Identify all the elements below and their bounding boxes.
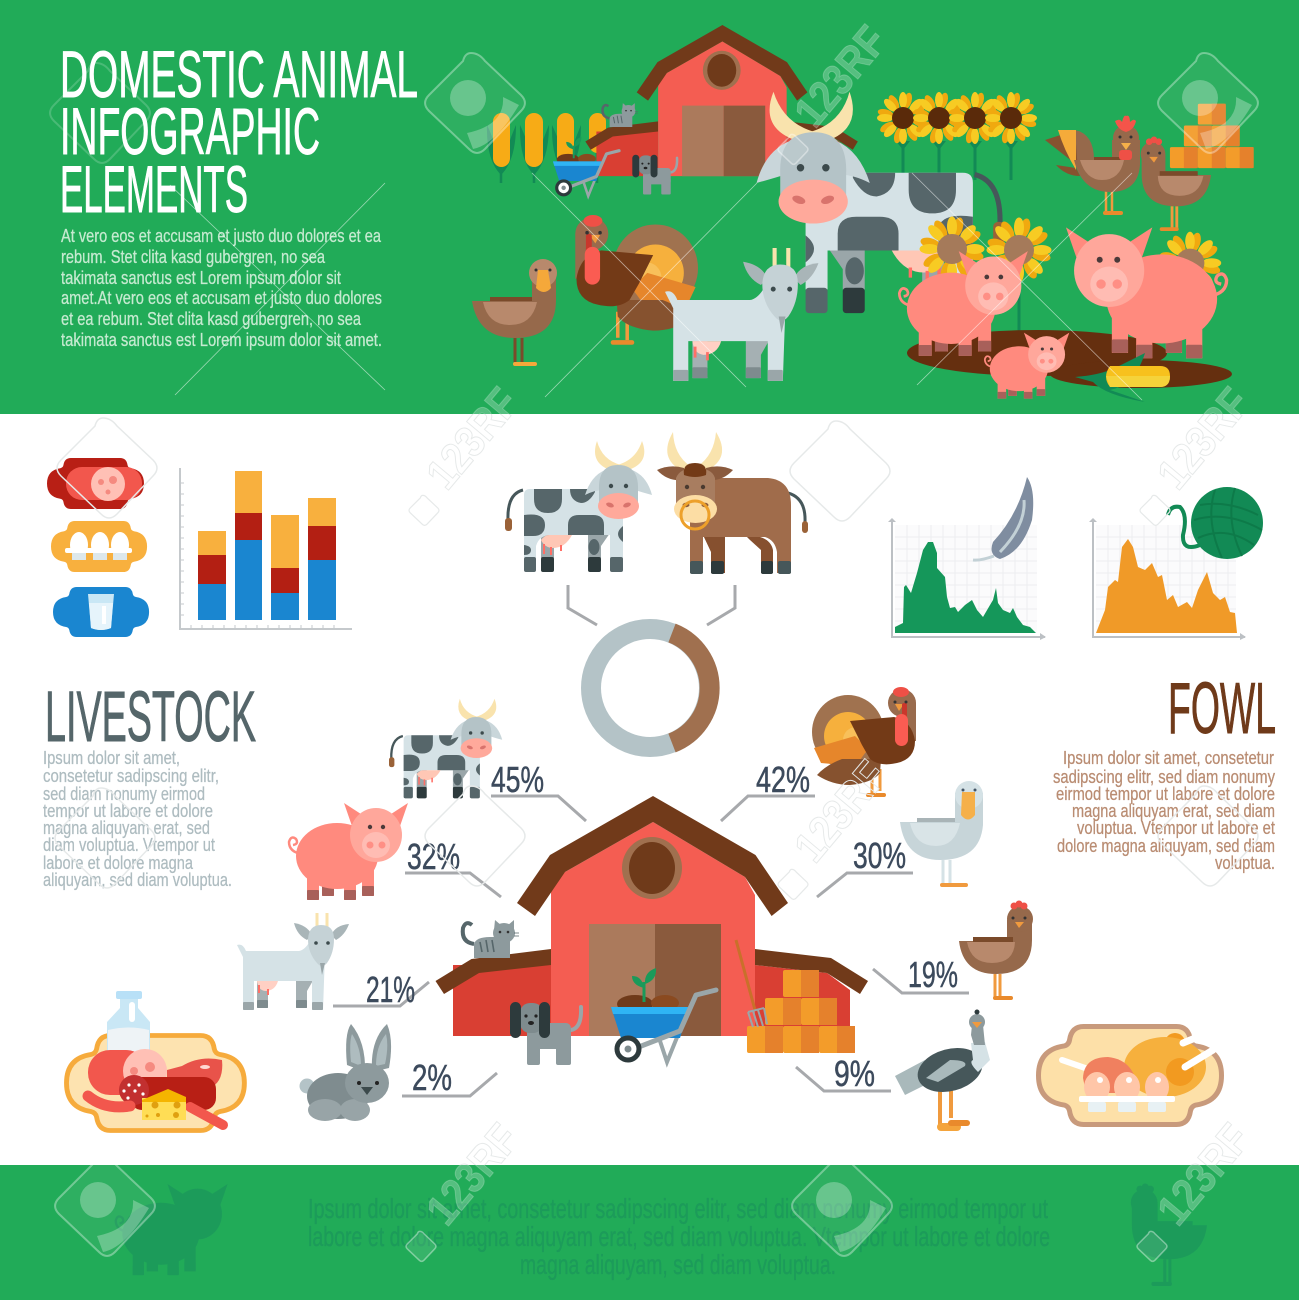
corn row bbox=[487, 113, 606, 183]
livestock paragraph: Ipsum dolor sit amet, bbox=[43, 748, 180, 768]
icon: yarn ball bbox=[1168, 487, 1263, 559]
footer paragraph bbox=[308, 1193, 1050, 1280]
fowl food plaque bbox=[1038, 1026, 1222, 1124]
title: DOMESTIC ANIMAL bbox=[60, 37, 418, 111]
percent labels: 21% bbox=[366, 969, 415, 1010]
livestock paragraph: aliquyam, sed diam voluptua. bbox=[43, 870, 232, 890]
livestock paragraph: diam voluptua. Vtempor ut bbox=[43, 835, 215, 855]
central hay stack bbox=[747, 970, 855, 1053]
percent labels: 45% bbox=[491, 759, 544, 800]
header rooster bbox=[1045, 116, 1140, 215]
hen with 19 percent bbox=[959, 900, 1033, 1000]
header corn cob bbox=[1075, 353, 1170, 402]
header band bbox=[0, 0, 1299, 414]
small cow with 45 percent bbox=[389, 699, 502, 798]
fowl paragraph bbox=[1053, 748, 1275, 873]
area chart: wool bbox=[1089, 518, 1246, 640]
livestock paragraph: labore et dolore magna bbox=[43, 853, 194, 873]
header sunflowers bbox=[877, 92, 1037, 180]
central barn bbox=[436, 796, 868, 1065]
percent labels: 2% bbox=[412, 1057, 452, 1098]
title: INFOGRAPHIC bbox=[60, 94, 320, 168]
livestock paragraph bbox=[43, 748, 232, 890]
rabbit with 2 percent bbox=[300, 1024, 391, 1121]
donut chart bbox=[591, 629, 710, 747]
percent labels: 42% bbox=[756, 759, 810, 800]
header piglet bbox=[985, 333, 1069, 399]
goat with 21 percent bbox=[237, 913, 349, 1010]
intro paragraph: takimata sanctus est Lorem ipsum dolor sit bbox=[61, 268, 341, 288]
header front sunflowers bbox=[919, 216, 1221, 340]
percent leader lines bbox=[333, 796, 969, 1096]
connector lines to donut bbox=[568, 585, 735, 625]
header pig small bbox=[899, 251, 1028, 356]
header barn bbox=[585, 25, 858, 194]
percent labels: 32% bbox=[407, 836, 460, 877]
header cow bbox=[757, 92, 1005, 313]
intro paragraph: At vero eos et accusam et justo duo dolores et ea bbox=[61, 226, 382, 246]
intro paragraph: et ea rebum. Stet clita kasd gubergren, no sea bbox=[61, 309, 362, 329]
ostrich with 9 percent bbox=[895, 1010, 990, 1131]
header goat bbox=[665, 248, 818, 381]
mud puddle bbox=[907, 330, 1232, 388]
area chart: feathers bbox=[888, 518, 1046, 640]
percent labels: 9% bbox=[834, 1053, 875, 1094]
central wheelbarrow bbox=[611, 968, 716, 1062]
percent labels: 19% bbox=[908, 954, 958, 995]
goose with 30 percent bbox=[900, 781, 983, 887]
footer pig silhouette bbox=[116, 1184, 228, 1275]
header hay stack bbox=[1170, 104, 1254, 168]
percent labels: 30% bbox=[853, 835, 906, 876]
header pig large bbox=[1066, 227, 1227, 358]
livestock paragraph: sed diam nonumy eirmod bbox=[43, 784, 205, 804]
header wheelbarrow bbox=[553, 137, 619, 196]
header duck bbox=[472, 259, 557, 366]
fowl paragraph: voluptua. bbox=[1215, 853, 1275, 873]
livestock paragraph: consetetur sadipscing elitr, bbox=[43, 766, 219, 786]
footer paragraph: magna aliquyam, sed diam voluptua. bbox=[520, 1249, 836, 1280]
icon: milk badge bbox=[53, 587, 149, 637]
intro paragraph: rebum. Stet clita kasd gubergren, no sea bbox=[61, 247, 326, 267]
title bbox=[60, 37, 418, 226]
intro paragraph bbox=[61, 226, 382, 350]
header hen bbox=[1141, 136, 1211, 231]
brown bull bbox=[657, 432, 808, 574]
footer hen silhouette bbox=[1131, 1184, 1207, 1286]
spotted cow bbox=[505, 441, 652, 572]
livestock heading: LIVESTOCK bbox=[45, 678, 256, 757]
icon: eggs badge bbox=[51, 521, 147, 572]
icon: meat badge bbox=[47, 458, 144, 509]
header turkey bbox=[575, 215, 698, 345]
pitchfork bbox=[736, 940, 767, 1027]
intro paragraph: takimata sanctus est Lorem ipsum dolor sit amet. bbox=[61, 330, 382, 350]
percent labels bbox=[366, 759, 958, 1098]
livestock paragraph: magna aliquyam erat, sed bbox=[43, 818, 210, 838]
stacked bar chart bbox=[180, 468, 352, 630]
livestock food plaque bbox=[66, 991, 244, 1130]
icon: feather bbox=[973, 477, 1033, 560]
footer band bbox=[0, 1165, 1299, 1300]
mid turkey with 42 percent bbox=[812, 687, 916, 797]
livestock paragraph: tempor ut labore et dolore bbox=[43, 801, 213, 821]
intro paragraph: amet.At vero eos et accusam et justo duo dolores bbox=[61, 288, 382, 308]
pig with 32 percent bbox=[289, 803, 408, 900]
title: ELEMENTS bbox=[60, 152, 248, 226]
